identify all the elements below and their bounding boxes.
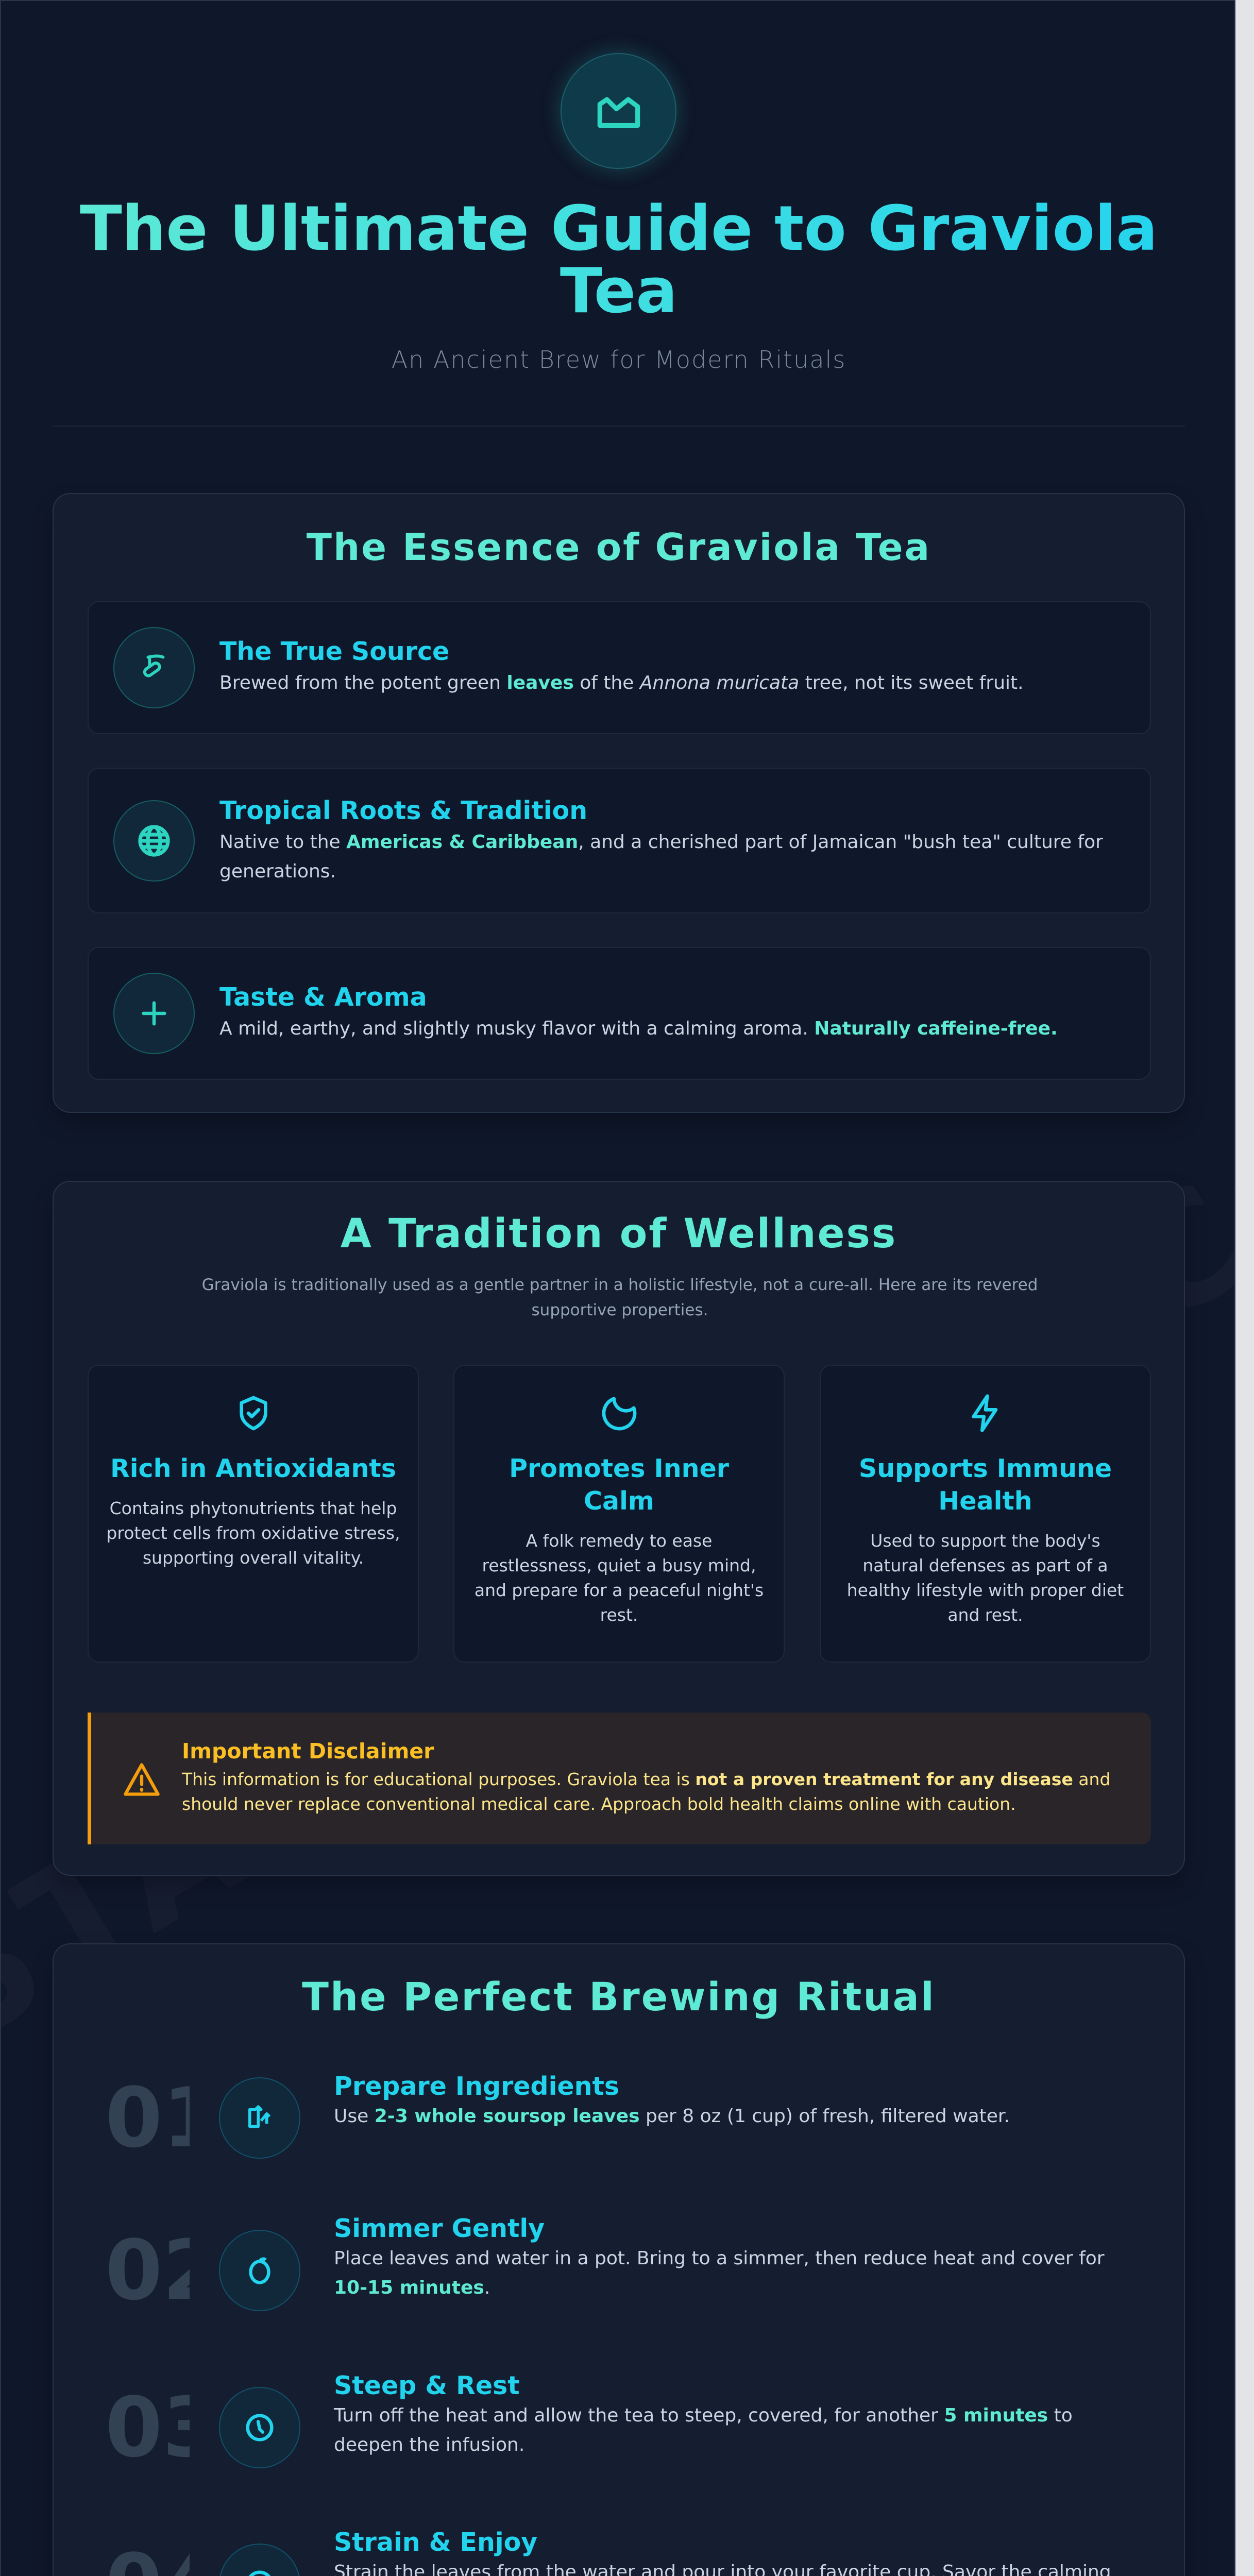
- icon: plus: [113, 973, 195, 1054]
- heading: brewing: The Perfect Brewing Ritual: [302, 1974, 936, 2020]
- step 2: Simmer Gently: [334, 2214, 545, 2243]
- subtitle: An Ancient Brew for Modern Rituals: [392, 346, 846, 374]
- card: tropical roots: Tropical Roots & Tradition: [219, 796, 587, 825]
- icon: shield: [240, 1396, 267, 1430]
- callout: disclaimer: [88, 1713, 1151, 1844]
- card: immune: Supports Immune Health: [859, 1454, 1112, 1516]
- card: immune: [820, 1365, 1151, 1663]
- card: true source: The True Source: [219, 637, 449, 666]
- callout: disclaimer: Important Disclaimer: [182, 1739, 434, 1764]
- card: true source: [88, 601, 1151, 734]
- card: taste: Taste & Aroma: [219, 982, 427, 1012]
- title: [32, 198, 1206, 323]
- step 1: Prepare Ingredients: [334, 2072, 619, 2101]
- card: antioxidants: Rich in Antioxidants: [110, 1454, 396, 1483]
- card: taste: A mild, earthy, and slightly musky flavor with a calming aroma. Naturally caffeine-free.: [219, 1018, 1058, 1039]
- step 2: [105, 2214, 1105, 2314]
- card: true source: Brewed from the potent green leaves of the Annona muricata tree, not its sweet fruit.: [219, 672, 1024, 693]
- icon: ingredients: [219, 2077, 300, 2159]
- step 3: Turn off the heat and allow the tea to steep, covered, for another 5 minutes to deepen the infusion.: [334, 2405, 1073, 2455]
- panel: brewing: [53, 1943, 1185, 2576]
- heading: wellness: A Tradition of Wellness: [341, 1211, 897, 1257]
- card: tropical roots: [88, 768, 1151, 913]
- card: tropical roots: Native to the Americas & Caribbean, and a cherished part of Jamaican "bush tea" culture for generations.: [219, 832, 1103, 882]
- step 1: Use 2-3 whole soursop leaves per 8 oz (1 cup) of fresh, filtered water.: [334, 2106, 1010, 2127]
- intro text: Graviola is traditionally used as a gentle partner in a holistic lifestyle, not a cure-all. Here are its revered supportive properties.: [202, 1276, 1038, 1319]
- title: The Ultimate Guide to Graviola: [80, 193, 1158, 265]
- card: immune: Used to support the body's natural defenses as part of a healthy lifestyle with proper diet and rest.: [847, 1531, 1124, 1625]
- card: antioxidants: [88, 1365, 419, 1663]
- step 4: Strain & Enjoy: [334, 2528, 537, 2557]
- step 4: [105, 2528, 1111, 2576]
- heading: essence: The Essence of Graviola Tea: [307, 526, 931, 569]
- icon: warning: [124, 1763, 160, 1796]
- step 1: [105, 2072, 1010, 2162]
- icon: play: [219, 2544, 300, 2576]
- icon: globe: [113, 800, 195, 882]
- title: Tea: [560, 256, 677, 327]
- callout: disclaimer: This information is for educational purposes. Graviola tea is not a proven treatment for any disease and should never replace conventional medical care. Approach bold health claims online with caution.: [182, 1769, 1110, 1814]
- icon: clock: [219, 2387, 300, 2468]
- card: calm: A folk remedy to ease restlessness, quiet a busy mind, and prepare for a peaceful night's rest.: [475, 1531, 764, 1625]
- header icon: [561, 53, 676, 169]
- icon: leaf: [113, 627, 195, 708]
- icon: bolt: [972, 1394, 997, 1432]
- step 2: Place leaves and water in a pot. Bring to a simmer, then reduce heat and cover for 10-15 minutes.: [334, 2248, 1105, 2298]
- step 3: [105, 2371, 1073, 2471]
- icon: moon: [602, 1397, 637, 1430]
- step 3: Steep & Rest: [334, 2371, 520, 2400]
- card: calm: Promotes Inner Calm: [509, 1454, 729, 1516]
- panel: wellness: [53, 1181, 1185, 1876]
- card: calm: [453, 1365, 785, 1663]
- icon: pot: [219, 2230, 300, 2311]
- card: taste: [88, 947, 1151, 1080]
- panel: essence: [53, 493, 1185, 1113]
- card: antioxidants: Contains phytonutrients that help protect cells from oxidative stress, supporting overall vitality.: [106, 1498, 400, 1568]
